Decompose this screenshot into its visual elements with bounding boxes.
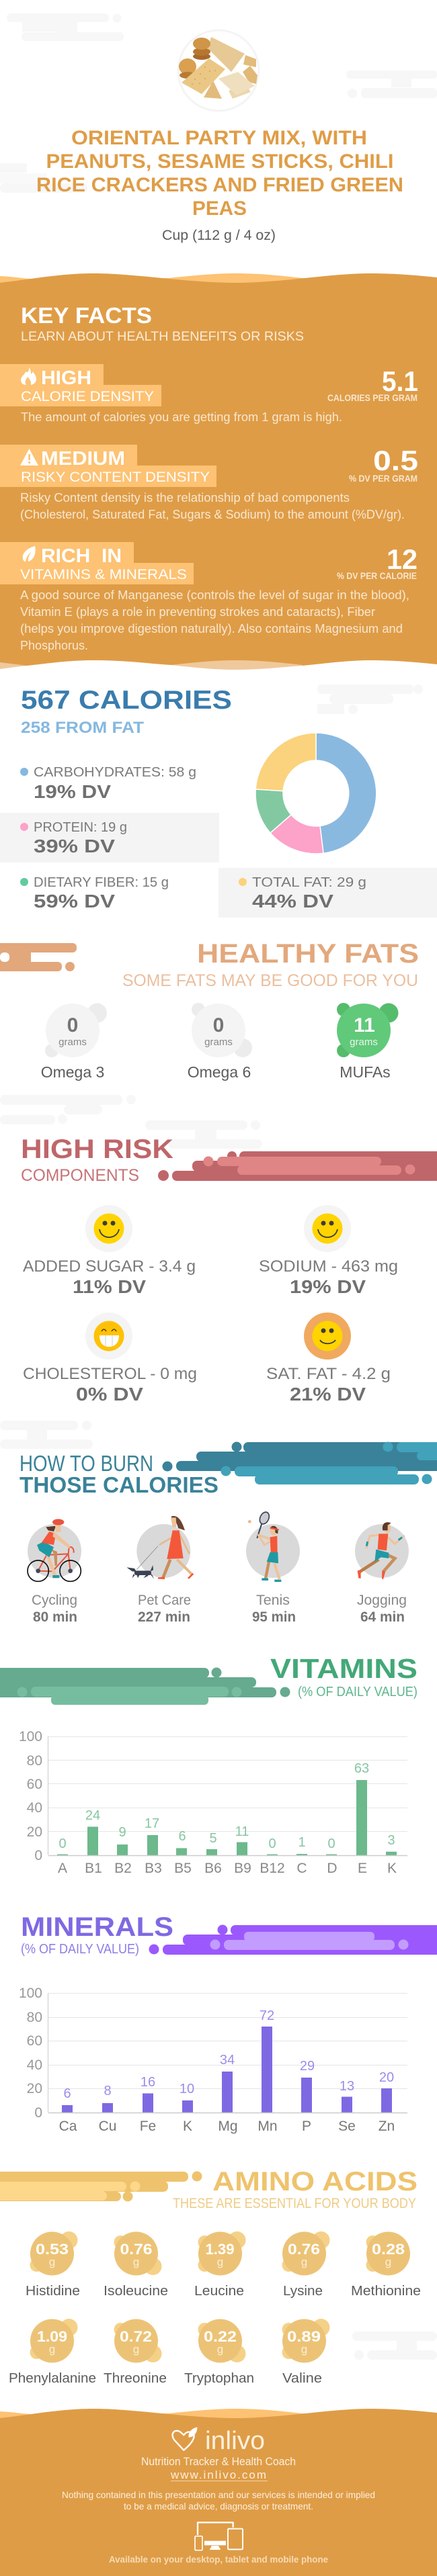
amino: methionine: 0.28 bbox=[372, 2241, 405, 2258]
icon: leaf bbox=[23, 546, 36, 562]
legend: total fat: TOTAL FAT: 29 g bbox=[252, 875, 366, 890]
tagline: Nutrition Tracker & Health Coach bbox=[141, 2455, 296, 2468]
fact: risky content density: % DV PER GRAM bbox=[349, 473, 418, 484]
stat: MUFAs: grams bbox=[350, 1036, 378, 1048]
stat: omega 6: grams bbox=[204, 1036, 233, 1048]
bar chart: vitamins: 0 bbox=[327, 1836, 335, 1851]
bar chart: vitamins: 40 bbox=[27, 1800, 42, 1816]
disclaimer: to be a medical advice, diagnosis or treatment. bbox=[124, 2501, 313, 2512]
bar chart: minerals: Mg bbox=[218, 2119, 238, 2134]
title: ORIENTAL PARTY MIX, WITH bbox=[71, 127, 367, 149]
legend: carbohydrates bbox=[20, 765, 196, 802]
amino: lysine: 0.76 bbox=[288, 2241, 320, 2258]
legend: protein: 39% DV bbox=[34, 836, 115, 856]
bar chart: minerals: Cu bbox=[99, 2119, 116, 2134]
bar chart: minerals: 13 bbox=[340, 2079, 354, 2094]
serving size: Cup (112 g / 4 oz) bbox=[162, 228, 276, 243]
amino: leucine: Leucine bbox=[194, 2284, 244, 2299]
bar chart: minerals: 10 bbox=[180, 2082, 194, 2096]
amino: valine: Valine bbox=[282, 2371, 322, 2386]
item: cholesterol: 0% DV bbox=[76, 1384, 143, 1405]
activity: cycling: 80 min bbox=[33, 1609, 77, 1625]
item: cholesterol bbox=[23, 1313, 197, 1405]
stat: omega 6 bbox=[188, 1003, 252, 1081]
amino: valine: g bbox=[301, 2343, 307, 2356]
fact: risky content density: MEDIUM bbox=[41, 448, 125, 470]
activity: pet care bbox=[126, 1516, 193, 1625]
amino: valine bbox=[282, 2319, 329, 2386]
panel: vitamins bbox=[0, 1653, 418, 1876]
legend: carbohydrates: 19% DV bbox=[34, 781, 111, 802]
bar chart: vitamins: B1 bbox=[85, 1861, 102, 1876]
legend: carbohydrates: CARBOHYDRATES: 58 g bbox=[34, 765, 196, 780]
legend: dietary fiber: 59% DV bbox=[34, 891, 115, 912]
bar chart: vitamins: B2 bbox=[114, 1861, 132, 1876]
fact: rich in vitamins and minerals: Phosphorus. bbox=[20, 639, 88, 652]
bar chart: minerals: Zn bbox=[379, 2119, 395, 2134]
item: sodium: 19% DV bbox=[290, 1276, 366, 1297]
amino: isoleucine: g bbox=[133, 2256, 139, 2268]
bar chart: vitamins: 0 bbox=[34, 1848, 42, 1863]
bar chart: vitamins: 80 bbox=[27, 1753, 42, 1769]
amino: threonine: Threonine bbox=[104, 2371, 167, 2386]
bar chart: minerals: P bbox=[302, 2119, 311, 2134]
item: added sugar bbox=[23, 1205, 196, 1297]
amino: tryptophan: g bbox=[217, 2343, 223, 2356]
amino: lysine: Lysine bbox=[283, 2284, 323, 2299]
amino: leucine bbox=[194, 2231, 246, 2299]
fact: rich in vitamins and minerals bbox=[0, 542, 418, 652]
panel: key facts bbox=[0, 273, 437, 678]
logo: inlivo: inlivo bbox=[205, 2427, 265, 2455]
bar chart: vitamins: 0 bbox=[268, 1836, 276, 1851]
bar chart: vitamins: 3 bbox=[387, 1833, 395, 1848]
decorative banner: amino acids bbox=[0, 2171, 202, 2202]
bar chart: minerals: 100 bbox=[19, 1986, 42, 2001]
amino: phenylalanine: Phenylalanine bbox=[9, 2371, 96, 2386]
bar chart: minerals: Mn bbox=[257, 2119, 278, 2134]
decorative banner: minerals bbox=[149, 1925, 437, 1955]
decorative banner: vitamins bbox=[0, 1667, 290, 1705]
heading: those calories: THOSE CALORIES bbox=[19, 1472, 218, 1497]
bar chart: vitamins: B3 bbox=[145, 1861, 162, 1876]
food image: crackers bbox=[178, 30, 259, 111]
fact: calorie density: CALORIE DENSITY bbox=[21, 389, 154, 404]
bar chart: minerals: Se bbox=[338, 2119, 356, 2134]
bar chart: vitamins: 11 bbox=[235, 1824, 249, 1839]
bar chart: vitamins: K bbox=[387, 1861, 397, 1876]
bar chart: vitamins: E bbox=[358, 1861, 367, 1876]
bar chart: vitamins: 1 bbox=[298, 1835, 306, 1850]
heading: how to burn: HOW TO BURN bbox=[19, 1451, 153, 1476]
amino: histidine: 0.53 bbox=[36, 2241, 69, 2258]
amino: threonine bbox=[104, 2319, 167, 2386]
panel: how to burn calories bbox=[19, 1441, 437, 1625]
bar chart: vitamins: 60 bbox=[27, 1777, 42, 1792]
stat: omega 6: Omega 6 bbox=[188, 1063, 251, 1081]
fact: rich in vitamins and minerals: VITAMINS & MINERALS bbox=[20, 567, 187, 582]
bar chart: vitamins: 5 bbox=[209, 1831, 217, 1846]
bar chart: minerals: 0 bbox=[34, 2105, 42, 2121]
fact: risky content density: Risky Content density is the relationship of bad components bbox=[20, 491, 350, 504]
bar chart: minerals: K bbox=[183, 2119, 192, 2134]
amino: tryptophan: Tryptophan bbox=[184, 2371, 254, 2386]
icon: warning triangle bbox=[20, 449, 38, 465]
amino: methionine: Methionine bbox=[351, 2284, 421, 2299]
item: added sugar: ADDED SUGAR - 3.4 g bbox=[23, 1257, 196, 1276]
fact: risky content density: 0.5 bbox=[373, 445, 418, 476]
amino: phenylalanine: g bbox=[49, 2343, 55, 2356]
bar chart: minerals: 6 bbox=[63, 2086, 71, 2101]
subheading: components: COMPONENTS bbox=[21, 1166, 139, 1185]
activity: jogging: Jogging bbox=[357, 1593, 407, 1608]
bar chart: vitamins: D bbox=[327, 1861, 337, 1876]
subheading: percent daily value: (% OF DAILY VALUE) bbox=[298, 1685, 418, 1699]
heading: vitamins: VITAMINS bbox=[270, 1653, 418, 1684]
heading: calories: 567 CALORIES bbox=[21, 686, 232, 715]
activity: cycling bbox=[28, 1519, 81, 1625]
bar chart: minerals: 34 bbox=[220, 2053, 235, 2068]
amino: methionine: g bbox=[385, 2256, 391, 2268]
bar chart: vitamins: C bbox=[296, 1861, 307, 1876]
amino: isoleucine: Isoleucine bbox=[104, 2284, 168, 2299]
bar chart: minerals: 20 bbox=[379, 2070, 394, 2085]
bar chart: vitamins: A bbox=[58, 1861, 67, 1876]
fact: rich in vitamins and minerals: RICH IN bbox=[41, 545, 122, 567]
stat: omega 3: Omega 3 bbox=[41, 1063, 104, 1081]
decorative banner: burn bbox=[163, 1441, 437, 1484]
bar chart: minerals: 72 bbox=[260, 2008, 274, 2023]
stat: omega 3 bbox=[41, 1004, 107, 1081]
stat: omega 3: grams bbox=[58, 1036, 87, 1048]
bar chart: vitamins bbox=[19, 1729, 407, 1876]
availability note: Available on your desktop, tablet and mobile phone bbox=[109, 2554, 328, 2565]
website link: www.inlivo.com bbox=[170, 2469, 266, 2481]
fact: calorie density: 5.1 bbox=[382, 365, 418, 397]
bar chart: vitamins: 24 bbox=[85, 1808, 100, 1823]
legend: total fat bbox=[239, 875, 366, 912]
stat: omega 3: 0 bbox=[67, 1014, 78, 1036]
heading: amino acids: AMINO ACIDS bbox=[212, 2167, 418, 2196]
bar chart: minerals: 40 bbox=[27, 2057, 42, 2073]
logo: inlivo bbox=[173, 2427, 265, 2455]
fact: calorie density bbox=[0, 364, 418, 424]
fact: risky content density: (Cholesterol, Saturated Fat, Sugars & Sodium) to the amount (%DV/gr). bbox=[20, 508, 405, 521]
heading: healthy fats: HEALTHY FATS bbox=[197, 939, 419, 969]
heading: high risk: HIGH RISK bbox=[21, 1135, 173, 1164]
decorative banner: healthy fats bbox=[0, 943, 77, 971]
amino: histidine: Histidine bbox=[26, 2284, 80, 2299]
bar chart: minerals: Fe bbox=[140, 2119, 156, 2134]
item: sodium: SODIUM - 463 mg bbox=[259, 1257, 398, 1276]
fact: risky content density bbox=[0, 445, 418, 521]
subheading: from fat: 258 FROM FAT bbox=[21, 719, 144, 737]
amino: lysine: g bbox=[301, 2256, 307, 2268]
subheading: SOME FATS MAY BE GOOD FOR YOU bbox=[122, 971, 418, 990]
heading: minerals: MINERALS bbox=[21, 1912, 173, 1942]
donut chart bbox=[255, 733, 376, 854]
amino: threonine: 0.72 bbox=[120, 2328, 152, 2345]
legend: total fat: 44% DV bbox=[252, 891, 333, 912]
bar chart: vitamins: 100 bbox=[19, 1729, 42, 1744]
amino: phenylalanine: 1.09 bbox=[37, 2328, 67, 2345]
disclaimer bbox=[62, 2489, 375, 2512]
stat: MUFAs bbox=[337, 1003, 398, 1081]
title: PEANUTS, SESAME STICKS, CHILI bbox=[46, 150, 394, 173]
heading: key facts: KEY FACTS bbox=[21, 303, 152, 328]
disclaimer: Nothing contained in this presentation and our services is intended or implied bbox=[62, 2489, 375, 2500]
bar chart: minerals: 20 bbox=[27, 2081, 42, 2096]
item: saturated fat: SAT. FAT - 4.2 g bbox=[266, 1365, 391, 1383]
amino: histidine: g bbox=[49, 2256, 55, 2268]
subheading: LEARN ABOUT HEALTH BENEFITS OR RISKS bbox=[21, 330, 304, 344]
activity: pet care: Pet Care bbox=[138, 1593, 191, 1608]
decorative banner: high risk bbox=[158, 1151, 437, 1181]
item: cholesterol: CHOLESTEROL - 0 mg bbox=[23, 1365, 197, 1383]
amino: tryptophan: 0.22 bbox=[204, 2328, 237, 2345]
bar chart: vitamins: 17 bbox=[145, 1816, 159, 1831]
amino: leucine: 1.39 bbox=[206, 2241, 234, 2258]
activity: jogging bbox=[355, 1522, 409, 1625]
item: saturated fat: 21% DV bbox=[290, 1384, 366, 1405]
title: PEAS bbox=[192, 197, 247, 220]
amino: phenylalanine bbox=[9, 2319, 96, 2386]
fact: rich in vitamins and minerals: % DV PER CALORIE bbox=[337, 570, 417, 581]
bar chart: vitamins: B9 bbox=[234, 1861, 251, 1876]
panel: footer bbox=[0, 2409, 437, 2576]
item: saturated fat bbox=[266, 1313, 391, 1405]
stat: omega 6: 0 bbox=[213, 1014, 224, 1036]
bar chart: vitamins: 9 bbox=[118, 1825, 126, 1840]
amino: tryptophan bbox=[184, 2319, 254, 2386]
bar chart: vitamins: 6 bbox=[178, 1829, 186, 1844]
activity: jogging: 64 min bbox=[360, 1609, 405, 1625]
bar chart: vitamins: B5 bbox=[174, 1861, 192, 1876]
icon: devices bbox=[195, 2522, 243, 2550]
bar chart: vitamins: B6 bbox=[204, 1861, 222, 1876]
title: RICE CRACKERS AND FRIED GREEN bbox=[36, 174, 403, 196]
fact: calorie density: CALORIES PER GRAM bbox=[327, 392, 418, 403]
bar chart: minerals bbox=[19, 1986, 407, 2134]
amino: methionine bbox=[351, 2231, 421, 2299]
fact: rich in vitamins and minerals: Vitamin E (plays a role in preventing strokes and cataracts), Fiber bbox=[20, 605, 375, 619]
panel: minerals bbox=[19, 1912, 437, 2134]
amino: isoleucine: 0.76 bbox=[120, 2241, 152, 2258]
bar chart: vitamins: 0 bbox=[58, 1836, 67, 1851]
legend: protein bbox=[20, 820, 127, 856]
bar chart: minerals: 8 bbox=[104, 2084, 112, 2098]
activity: cycling: Cycling bbox=[32, 1593, 77, 1608]
item: added sugar: 11% DV bbox=[73, 1276, 146, 1297]
amino: lysine bbox=[282, 2231, 329, 2299]
amino: leucine: g bbox=[217, 2256, 223, 2268]
bar chart: minerals: 60 bbox=[27, 2033, 42, 2049]
fact: rich in vitamins and minerals: (helps you improve digestion naturally). Also contains Magnesium and bbox=[20, 622, 403, 635]
icon: flame bbox=[21, 367, 36, 385]
panel: calories bbox=[0, 686, 437, 918]
fact: calorie density: The amount of calories you are getting from 1 gram is high. bbox=[21, 410, 342, 424]
fact: rich in vitamins and minerals: A good source of Manganese (controls the level of sugar in the blood), bbox=[20, 588, 409, 602]
fact: rich in vitamins and minerals: 12 bbox=[387, 543, 418, 575]
bar chart: vitamins: 63 bbox=[354, 1761, 369, 1776]
bar chart: vitamins: 20 bbox=[27, 1824, 42, 1840]
legend: protein: PROTEIN: 19 g bbox=[34, 820, 127, 835]
activity: tennis: 95 min bbox=[252, 1609, 296, 1625]
amino: isoleucine bbox=[104, 2231, 168, 2299]
bar chart: vitamins: B12 bbox=[260, 1861, 285, 1876]
fact: risky content density: RISKY CONTENT DENSITY bbox=[21, 470, 210, 485]
fact: calorie density: HIGH bbox=[41, 367, 91, 389]
bar chart: minerals: 80 bbox=[27, 2010, 42, 2025]
bar chart: minerals: Ca bbox=[59, 2119, 77, 2134]
panel: amino acids bbox=[0, 2167, 421, 2386]
activity: pet care: 227 min bbox=[138, 1609, 190, 1625]
activity: tennis bbox=[246, 1511, 300, 1625]
panel: healthy fats bbox=[0, 939, 419, 1081]
title bbox=[36, 127, 403, 220]
activity: tennis: Tenis bbox=[256, 1593, 290, 1608]
legend: dietary fiber bbox=[20, 875, 169, 912]
bar chart: minerals: 16 bbox=[141, 2075, 155, 2090]
amino: histidine bbox=[26, 2231, 80, 2299]
panel: high risk bbox=[21, 1135, 437, 1405]
amino: threonine: g bbox=[133, 2343, 139, 2356]
bar chart: minerals: 29 bbox=[300, 2059, 315, 2074]
amino: valine: 0.89 bbox=[287, 2328, 321, 2345]
stat: MUFAs: 11 bbox=[354, 1014, 375, 1036]
stat: MUFAs: MUFAs bbox=[340, 1063, 391, 1081]
subheading: percent daily value: (% OF DAILY VALUE) bbox=[21, 1942, 139, 1957]
legend: dietary fiber: DIETARY FIBER: 15 g bbox=[34, 875, 169, 890]
item: sodium bbox=[259, 1205, 398, 1297]
